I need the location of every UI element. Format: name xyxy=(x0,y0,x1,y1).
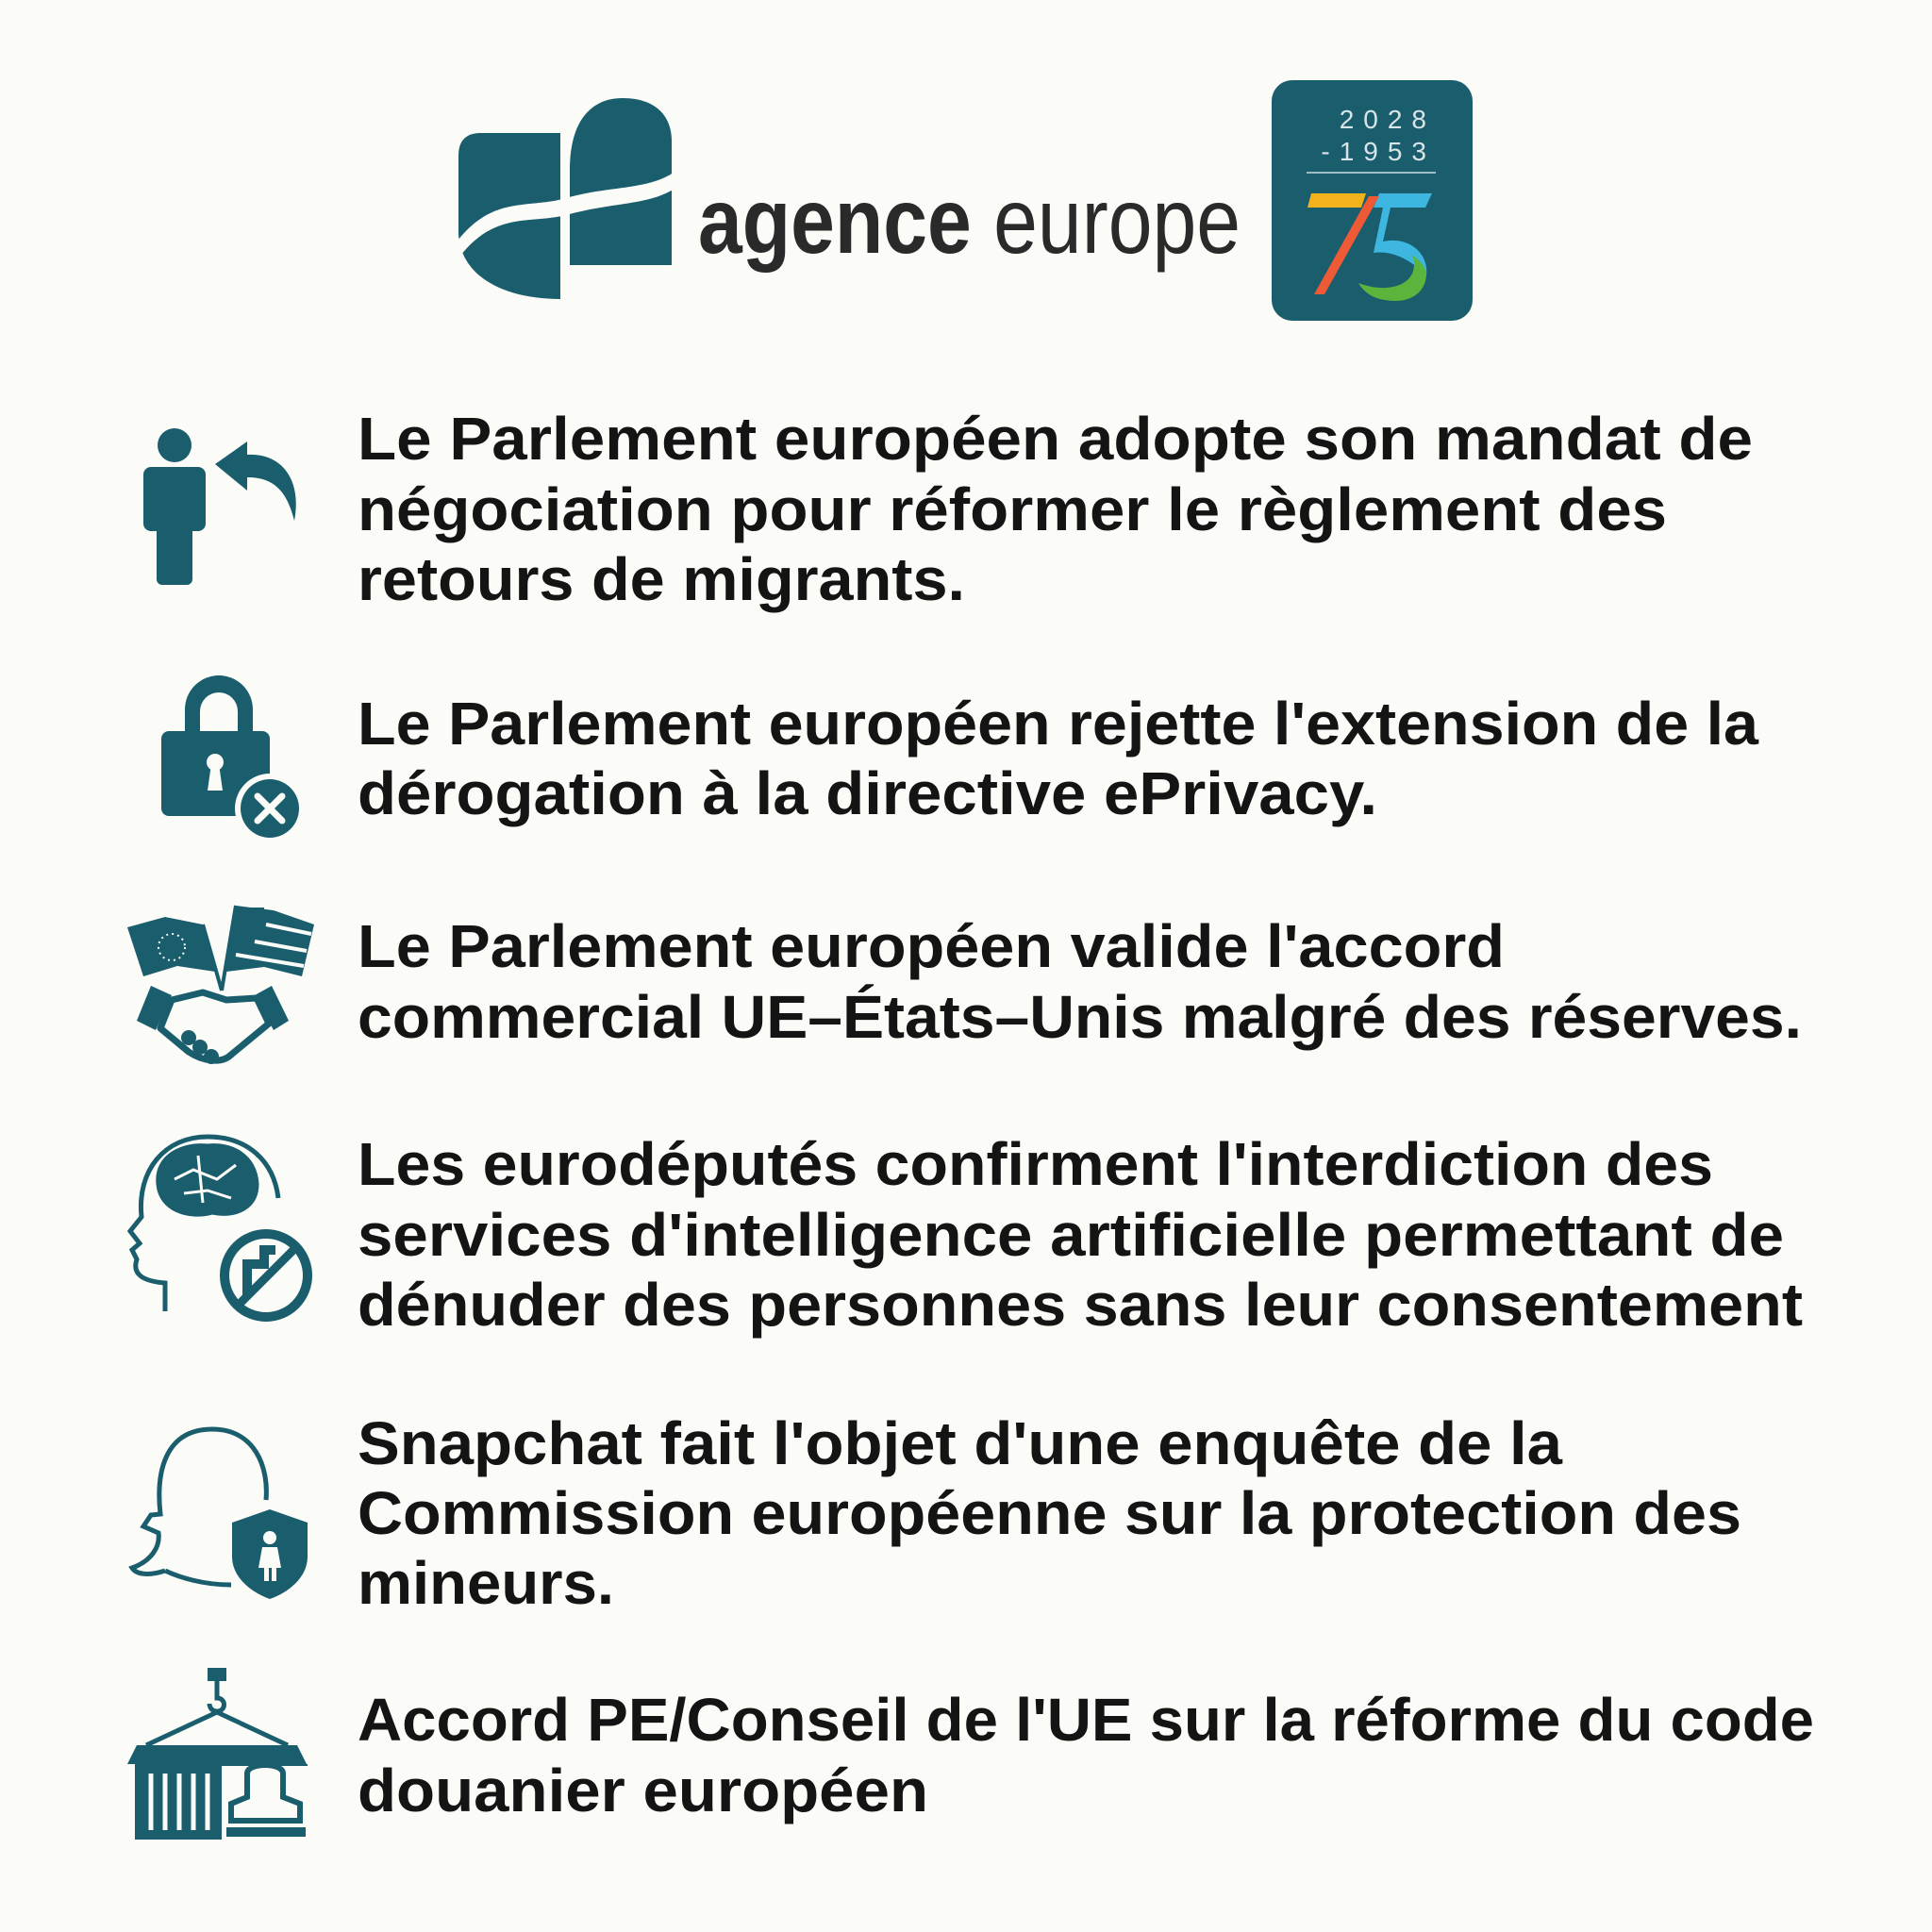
text block: item 3: commercial UE–États–Unis malgré des réserves. xyxy=(358,983,1802,1051)
text block: item 4: Les eurodéputés confirment l'interdiction des xyxy=(358,1130,1713,1198)
badge 75 years xyxy=(1272,80,1473,321)
text block: item 3 xyxy=(358,912,1802,1051)
icon: padlock with x xyxy=(161,675,305,843)
text block: item 6: Accord PE/Conseil de l'UE sur la réforme du code xyxy=(358,1686,1814,1754)
icon: customs container with crane hook and stamp xyxy=(127,1668,309,1841)
text block: item 1: négociation pour réformer le règlement des xyxy=(358,475,1667,543)
text block: item 2 xyxy=(358,690,1758,827)
text block: item 5: Commission européenne sur la protection des xyxy=(358,1479,1741,1547)
text block: item 4: dénuder des personnes sans leur consentement xyxy=(358,1271,1803,1339)
text block: item 5: Snapchat fait l'objet d'une enquête de la xyxy=(358,1409,1562,1477)
text block: item 2: dérogation à la directive ePrivacy. xyxy=(358,759,1377,827)
icon: AI brain with prohibited xyxy=(130,1137,308,1317)
text block: item 1: Le Parlement européen adopte son mandat de xyxy=(358,405,1753,473)
text block: item 4 xyxy=(358,1130,1803,1339)
logo mark xyxy=(453,98,677,299)
text block: item 5: mineurs. xyxy=(358,1549,614,1617)
icon: person returning xyxy=(143,428,296,585)
badge 75 years: -1953 xyxy=(1321,137,1436,166)
text block: item 1 xyxy=(358,405,1753,613)
logo text: agence europe xyxy=(698,169,1241,273)
text block: item 5 xyxy=(358,1409,1741,1617)
text block: item 4: services d'intelligence artificielle permettant de xyxy=(358,1201,1784,1269)
text block: item 3: Le Parlement européen valide l'accord xyxy=(358,912,1505,980)
icon: EU-US flags handshake xyxy=(127,906,314,1064)
text block: item 2: Le Parlement européen rejette l'extension de la xyxy=(358,690,1758,758)
icon: snapchat ghost with child shield xyxy=(132,1429,308,1599)
badge 75 years: 2028 xyxy=(1340,105,1436,134)
text block: item 6 xyxy=(358,1686,1814,1824)
text block: item 1: retours de migrants. xyxy=(358,545,965,613)
text block: item 6: douanier européen xyxy=(358,1757,928,1824)
